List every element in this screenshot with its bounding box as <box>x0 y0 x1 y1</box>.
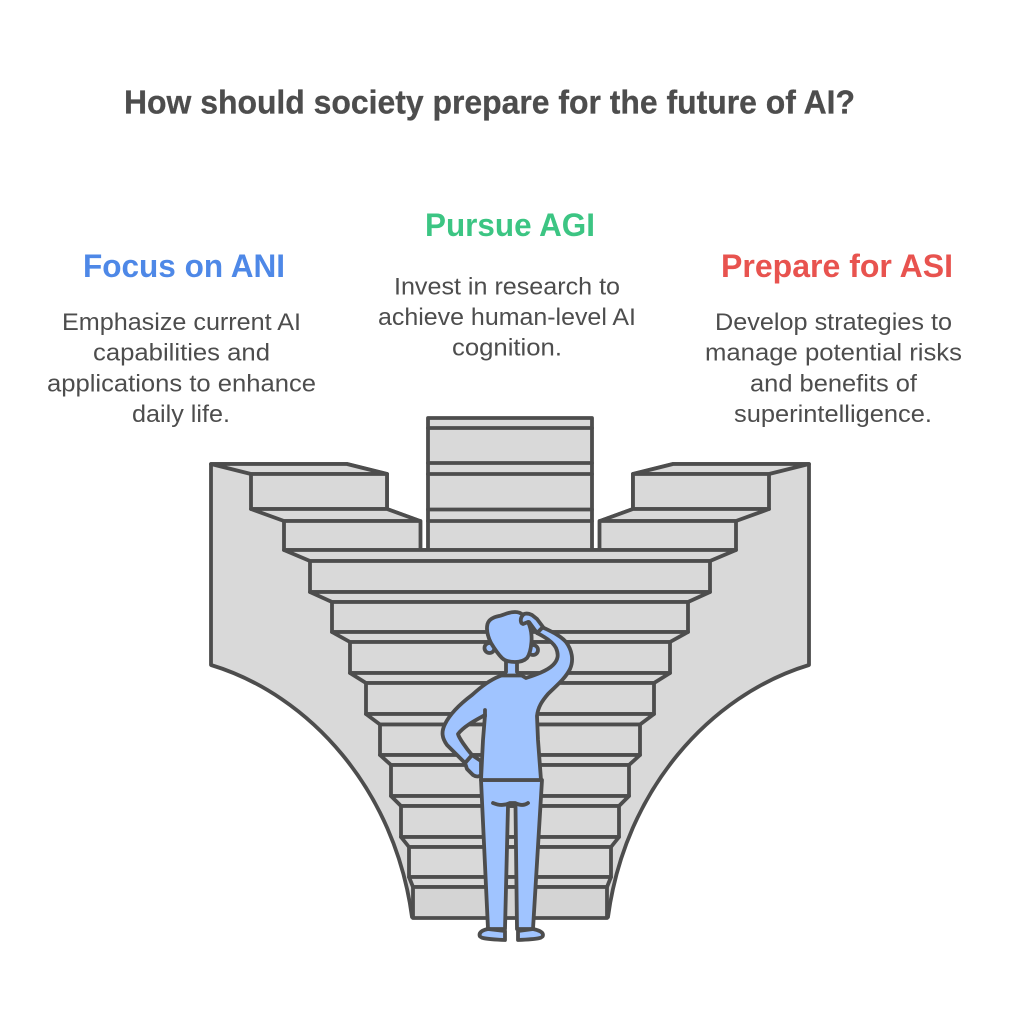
person scratching head <box>443 612 572 940</box>
torso and arms <box>443 627 572 780</box>
head <box>487 612 532 662</box>
description: Prepare for ASI: manage potential risks <box>705 340 962 367</box>
left hand on hip <box>465 755 481 776</box>
description: Prepare for ASI: Develop strategies to <box>715 309 952 336</box>
main descending steps <box>284 550 736 918</box>
title: How should society prepare for the future of AI? <box>124 84 855 122</box>
legs <box>481 780 542 929</box>
description: Prepare for ASI: superintelligence. <box>734 401 932 428</box>
neck <box>502 658 521 676</box>
text block: Pursue AGI <box>378 207 636 362</box>
right upper steps <box>600 464 809 550</box>
description: Focus on ANI <box>47 309 316 428</box>
description: Pursue AGI: cognition. <box>452 334 562 362</box>
text block: Focus on ANI <box>47 248 316 428</box>
staircase structure <box>211 464 809 918</box>
text block: Prepare for ASI <box>705 248 962 428</box>
heading: Focus on ANI: Focus on ANI <box>83 248 285 284</box>
heading: Pursue AGI: Pursue AGI <box>425 207 595 243</box>
shoes <box>480 929 543 940</box>
description: Pursue AGI: achieve human-level AI <box>378 304 636 331</box>
raised hand <box>519 614 543 633</box>
heading: Prepare for ASI: Prepare for ASI <box>721 248 953 284</box>
description: Pursue AGI <box>378 273 636 362</box>
ears <box>484 643 538 655</box>
description: Focus on ANI: Emphasize current AI <box>62 309 301 336</box>
description: Prepare for ASI: and benefits of <box>750 370 917 397</box>
description: Prepare for ASI <box>705 309 962 428</box>
description: Focus on ANI: applications to enhance <box>47 370 316 397</box>
staircase silhouette <box>211 464 809 917</box>
description: Focus on ANI: daily life. <box>132 401 230 428</box>
left upper steps <box>211 464 420 550</box>
description: Pursue AGI: Invest in research to <box>394 273 620 300</box>
central tower: path to AGI <box>428 418 592 552</box>
description: Focus on ANI: capabilities and <box>93 340 270 367</box>
armpit crease <box>483 710 487 716</box>
